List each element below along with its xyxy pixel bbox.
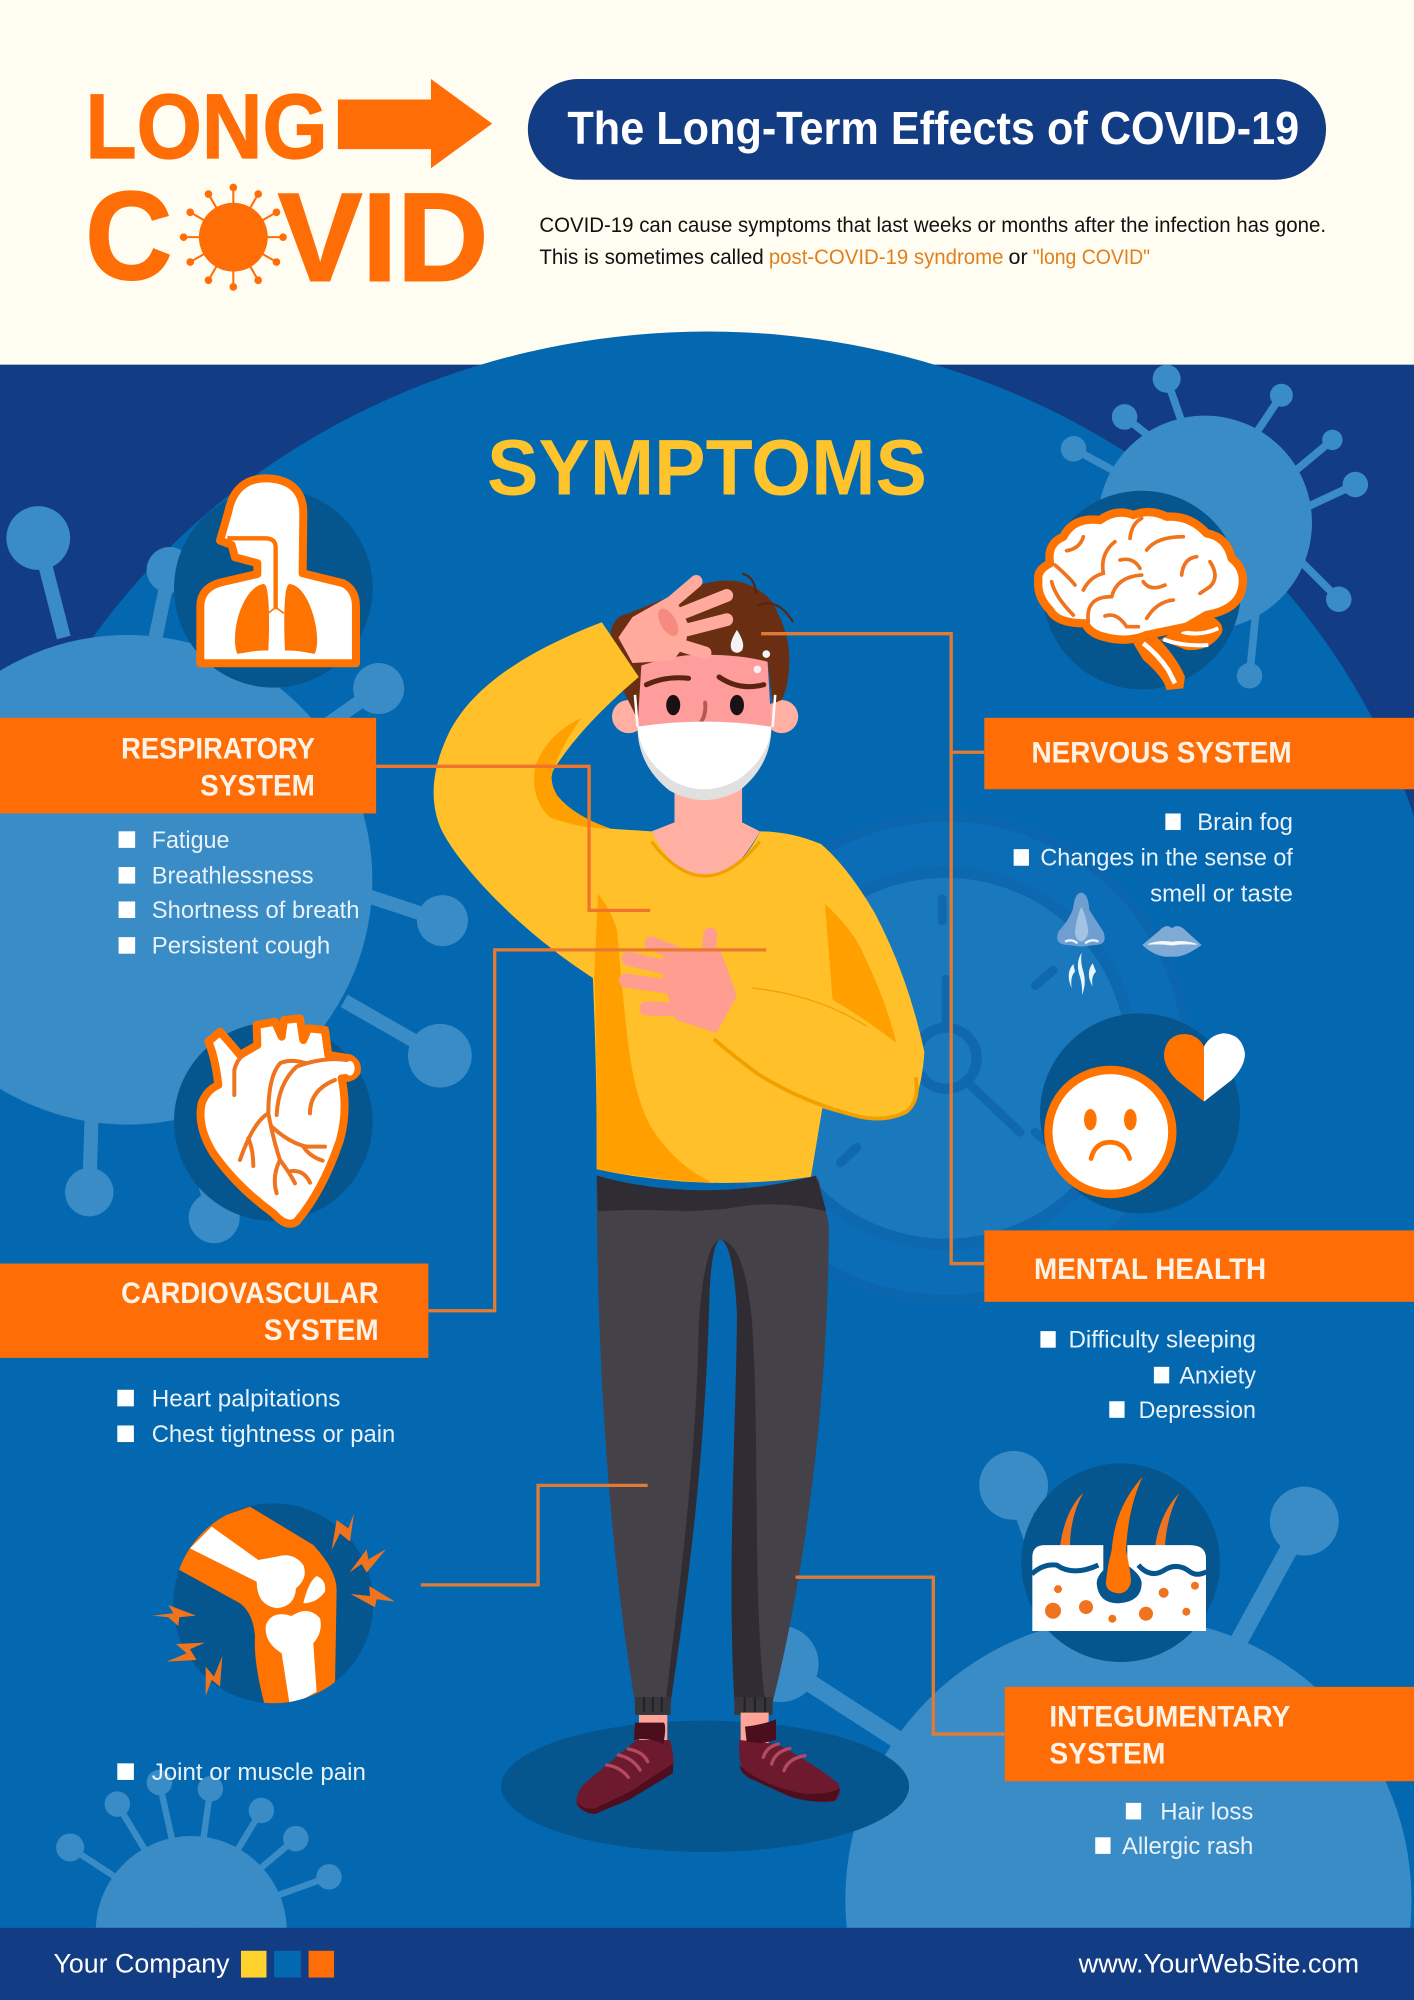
symptom list: nervous [1014,809,1293,907]
panel: cardiovascular system [0,1264,428,1448]
symptom list: mental health [1040,1327,1257,1424]
intro paragraph: "long COVID" [1033,246,1150,269]
symptom list: cardiovascular: Chest tightness or pain [152,1421,395,1448]
label bar: integumentary [1005,1687,1414,1781]
label bar: mental health: MENTAL HEALTH [1034,1253,1266,1286]
panel: respiratory system [0,718,376,960]
sweater [434,622,924,1183]
header background [0,0,1414,366]
background virus: bottom right [742,1451,1414,1928]
symptom list: mental health: Difficulty sleeping [1068,1327,1256,1354]
symptom list: cardiovascular: Heart palpitations [152,1385,340,1412]
forearm sleeve [714,988,917,1119]
logo: LONG COVID [85,76,492,308]
footer [0,1928,1414,2000]
background virus: bottom left [56,1770,342,1928]
intro paragraph: or [1009,246,1028,269]
logo virus O [180,184,287,291]
symptom list: integumentary: Hair loss [1160,1798,1253,1825]
label bar: cardiovascular [0,1264,428,1358]
panel: integumentary system [1005,1687,1414,1860]
symptom list: respiratory: Fatigue [152,827,230,854]
logo arrow [338,79,492,168]
symptom list: mental health: Anxiety [1179,1362,1257,1389]
shoes [576,1713,841,1814]
icon: skin [1021,1463,1220,1662]
symptom list: nervous: smell or taste [1150,880,1293,907]
label bar: nervous: NERVOUS SYSTEM [1031,736,1292,769]
icon: sad face and heart [1040,1013,1245,1213]
man figure [434,574,924,1814]
label bar: nervous [984,718,1414,789]
connector: respiratory [376,766,650,910]
icon: brain [1038,491,1243,690]
raised hand [618,581,727,663]
logo letter C: C [85,167,172,306]
label bar: cardiovascular: SYSTEM [264,1314,379,1347]
symptom list: integumentary [1095,1798,1253,1860]
connector: cardiovascular [428,950,766,1311]
intro paragraph: post-COVID-19 syndrome [769,246,1003,269]
footer: www.YourWebSite.com [1078,1948,1359,1978]
symptom list: mental health: Depression [1139,1397,1256,1424]
intro paragraph: COVID-19 can cause symptoms that last weeks or months after the infection has gone. [539,214,1326,237]
figure shadow [501,1721,909,1852]
icon: nose and lips [1057,893,1202,995]
eyes and brows [646,677,764,722]
neck [652,778,760,880]
face [638,655,771,797]
label bar: integumentary: SYSTEM [1049,1737,1165,1770]
hair [611,581,789,727]
chest hand [626,935,737,1033]
icon: lungs [174,478,373,688]
loose hair strands [742,574,793,622]
title pill [528,79,1326,180]
background virus: top right [1061,365,1368,689]
symptoms heading: SYMPTOMS [487,423,927,512]
label bar: mental health [984,1230,1414,1302]
connector: joints [421,1485,648,1585]
intro paragraph: This is sometimes called [539,246,764,269]
label bar: respiratory: SYSTEM [200,770,315,803]
symptom list: nervous: Brain fog [1197,809,1293,836]
symptom list: cardiovascular [117,1385,395,1448]
connector: nervous and mental [761,634,984,1264]
icon: heart [174,1018,373,1224]
label bar: cardiovascular: CARDIOVASCULAR [121,1277,379,1310]
logo letters VID: VID [278,169,488,308]
symptom list: nervous: Changes in the sense of [1040,845,1293,872]
ears [612,700,798,733]
intro paragraph [539,214,1326,269]
icon: knee joint [152,1503,395,1710]
symptom list: joints: Joint or muscle pain [152,1759,366,1786]
background clock [705,817,1187,1299]
connector: integumentary [796,1577,1005,1734]
symptom list: respiratory [119,827,360,960]
logo word LONG: LONG [85,76,328,178]
label bar: respiratory [0,718,376,813]
symptom list: integumentary: Allergic rash [1122,1833,1253,1860]
sweat drops [731,630,770,673]
title pill: The Long-Term Effects of COVID-19 [567,102,1299,154]
symptom list: respiratory: Shortness of breath [152,897,360,924]
face mask [635,695,775,800]
background virus: left [0,506,472,1243]
label bar: integumentary: INTEGUMENTARY [1049,1700,1290,1733]
panel: mental health [984,1230,1414,1424]
panel: nervous system [984,718,1414,907]
label bar: respiratory: RESPIRATORY [121,733,315,766]
footer: Your Company [54,1948,230,1978]
pants [597,1176,829,1715]
symptom list: respiratory: Breathlessness [152,863,314,890]
symptom list: respiratory: Persistent cough [152,933,330,960]
